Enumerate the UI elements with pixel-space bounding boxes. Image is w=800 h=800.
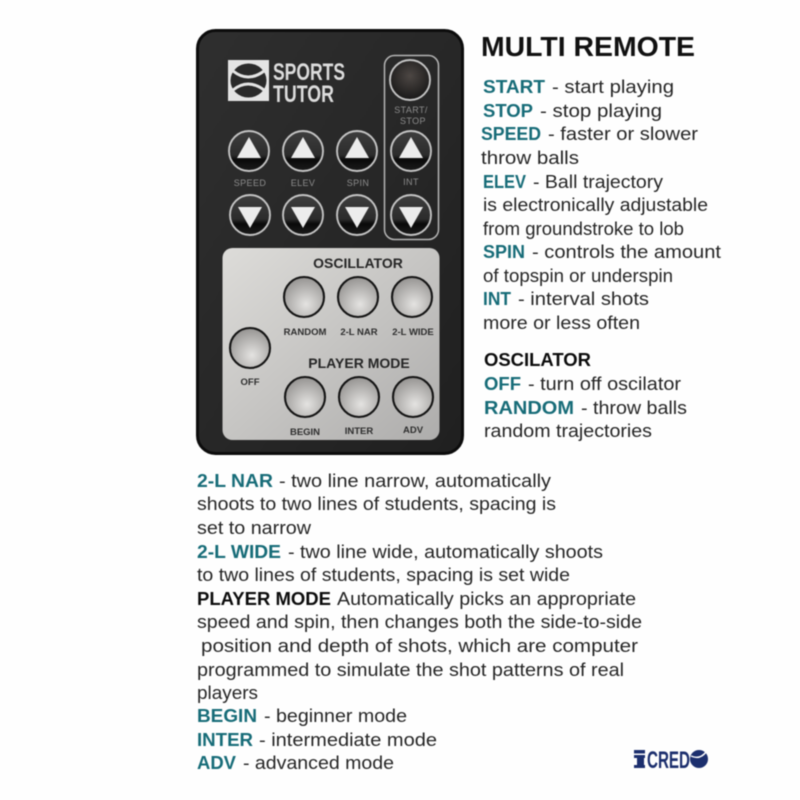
start/stop button: STOP	[400, 116, 426, 126]
text block: player levels: BEGIN	[197, 705, 257, 726]
text block: main controls: - faster or slower	[548, 123, 698, 144]
text block: main controls: STOP	[483, 100, 533, 121]
text block: player mode: players	[197, 682, 258, 703]
text block: player mode: speed and spin, then changes both the side-to-side	[197, 611, 642, 632]
text block: player mode: Automatically picks an appropriate	[337, 588, 636, 609]
text block: player levels: - beginner mode	[264, 705, 407, 726]
oscillator buttons: 2-L NAR	[340, 327, 378, 338]
start/stop button	[390, 60, 430, 126]
text block: oscillator: random trajectories	[484, 420, 652, 441]
text block: main controls: - start playing	[552, 76, 674, 97]
text block: player levels	[197, 705, 437, 773]
start/stop and interval frame	[384, 56, 438, 240]
player mode buttons: ADV	[403, 425, 424, 436]
text block: player levels: INTER	[197, 729, 253, 750]
start/stop button: START/	[394, 105, 428, 115]
off button	[230, 328, 270, 388]
text block: two line modes: - two line narrow, automatically	[279, 470, 552, 491]
text block: two line modes: set to narrow	[197, 517, 312, 538]
text block: two line modes: to two lines of students, spacing is set wide	[197, 564, 570, 585]
text block: main controls: START	[483, 76, 546, 97]
control labels: SPIN	[347, 178, 369, 188]
text block: player levels: - advanced mode	[243, 752, 394, 773]
player mode buttons: BEGIN	[290, 427, 320, 438]
icon: iCRED logo: CRED	[647, 747, 690, 774]
text block: main controls	[481, 76, 721, 333]
remote body	[198, 30, 462, 454]
title: MULTI REMOTE	[481, 31, 695, 62]
text block: main controls: throw balls	[481, 147, 579, 168]
control labels	[234, 177, 419, 188]
text block: main controls: - Ball trajectory	[533, 171, 664, 192]
text block: main controls: INT	[483, 288, 512, 309]
text block: player mode: PLAYER MODE	[197, 588, 331, 609]
oscillator buttons	[284, 277, 434, 338]
player mode buttons: INTER	[345, 426, 373, 437]
text block: oscillator: OSCILATOR	[484, 349, 591, 370]
brand logo: TUTOR	[273, 81, 334, 108]
text block: player levels: - intermediate mode	[259, 729, 437, 750]
player mode buttons	[285, 377, 433, 438]
text block: two line modes: shoots to two lines of students, spacing is	[197, 493, 556, 514]
text block: oscillator: RANDOM	[484, 397, 574, 418]
down buttons	[230, 195, 431, 235]
text block: player levels: ADV	[197, 752, 237, 773]
oscillator buttons: RANDOM	[284, 327, 326, 338]
text block: oscillator: - turn off oscilator	[528, 373, 681, 394]
oscillator heading: OSCILLATOR	[313, 255, 403, 271]
control labels: INT	[403, 177, 419, 187]
text block: main controls: - controls the amount	[532, 241, 721, 262]
brand logo	[228, 59, 345, 108]
off button: OFF	[240, 377, 260, 388]
text block: main controls: more or less often	[483, 312, 640, 333]
text block: main controls: ELEV	[483, 171, 527, 192]
remote control	[198, 30, 462, 454]
control labels: ELEV	[291, 178, 315, 188]
oscillator buttons: 2-L WIDE	[392, 327, 434, 338]
text block: player mode	[197, 588, 642, 703]
text block: two line modes	[197, 470, 603, 585]
text block: two line modes: - two line wide, automatically shoots	[288, 541, 603, 562]
up buttons	[229, 131, 431, 171]
text block: oscillator: OFF	[484, 373, 521, 394]
brand logo: SPORTS	[273, 59, 345, 86]
text block: main controls: - stop playing	[540, 100, 662, 121]
text block: main controls: - interval shots	[518, 288, 649, 309]
control labels: SPEED	[234, 178, 266, 188]
text block: oscillator	[484, 349, 687, 441]
text block: main controls: of topspin or underspin	[483, 265, 673, 286]
text block: two line modes: 2-L NAR	[197, 470, 273, 491]
text block: two line modes: 2-L WIDE	[197, 541, 281, 562]
text block: main controls: is electronically adjustable	[483, 194, 708, 215]
text block: oscillator: - throw balls	[581, 397, 687, 418]
silver panel	[222, 248, 440, 440]
text block: player mode: programmed to simulate the shot patterns of real	[197, 659, 624, 680]
text block: main controls: SPEED	[481, 123, 541, 144]
text block: player mode: position and depth of shots, which are computer	[201, 635, 638, 656]
player mode heading: PLAYER MODE	[308, 355, 410, 371]
text block: main controls: from groundstroke to lob	[483, 218, 684, 239]
text block: main controls: SPIN	[483, 241, 525, 262]
